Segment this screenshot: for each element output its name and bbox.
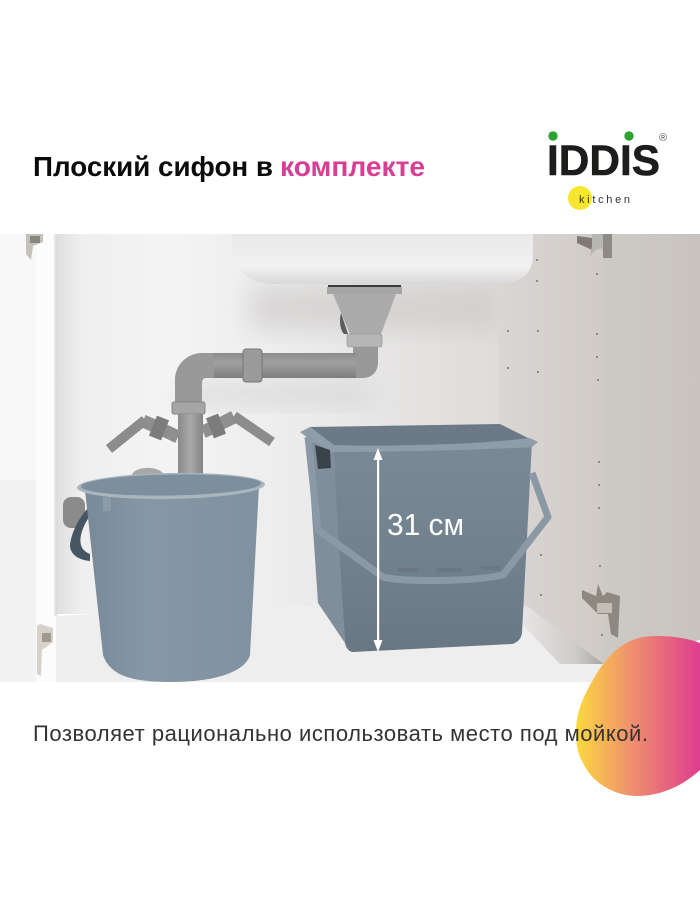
back wall (55, 234, 505, 614)
left door (0, 234, 58, 682)
cabinet floor (56, 614, 603, 682)
floor shadow near right wall (522, 606, 603, 664)
pipe shadow on wall (180, 382, 370, 406)
title (33, 151, 425, 182)
wall shadow under sink (250, 285, 500, 330)
logo: iddis kitchen: kitchen (579, 194, 630, 206)
title: комплекте (280, 151, 425, 182)
pipes (172, 347, 378, 476)
left door hinges (26, 234, 53, 676)
description text: Позволяет рационально использовать место под мойкой. (33, 721, 648, 746)
logo: iddis kitchen: IDDIS (547, 137, 660, 185)
title: Плоский сифон в (33, 151, 273, 182)
right hinges (577, 234, 620, 638)
logo: iddis kitchen (547, 131, 667, 210)
Y fittings with hose connectors (109, 416, 272, 449)
left bucket with handle (63, 468, 265, 682)
right door (603, 234, 700, 666)
sink (232, 234, 533, 284)
logo: iddis kitchen: ® (659, 132, 667, 144)
height arrow (374, 448, 382, 652)
right bucket with handle (300, 424, 548, 652)
side wall drill holes (507, 259, 603, 636)
decorative gradient blob (576, 636, 700, 796)
right cabinet side wall (499, 234, 604, 664)
siphon: drain and upper fitting (327, 285, 402, 347)
photo: cabinet under sink (0, 234, 700, 682)
height label: 31 см (387, 507, 464, 542)
